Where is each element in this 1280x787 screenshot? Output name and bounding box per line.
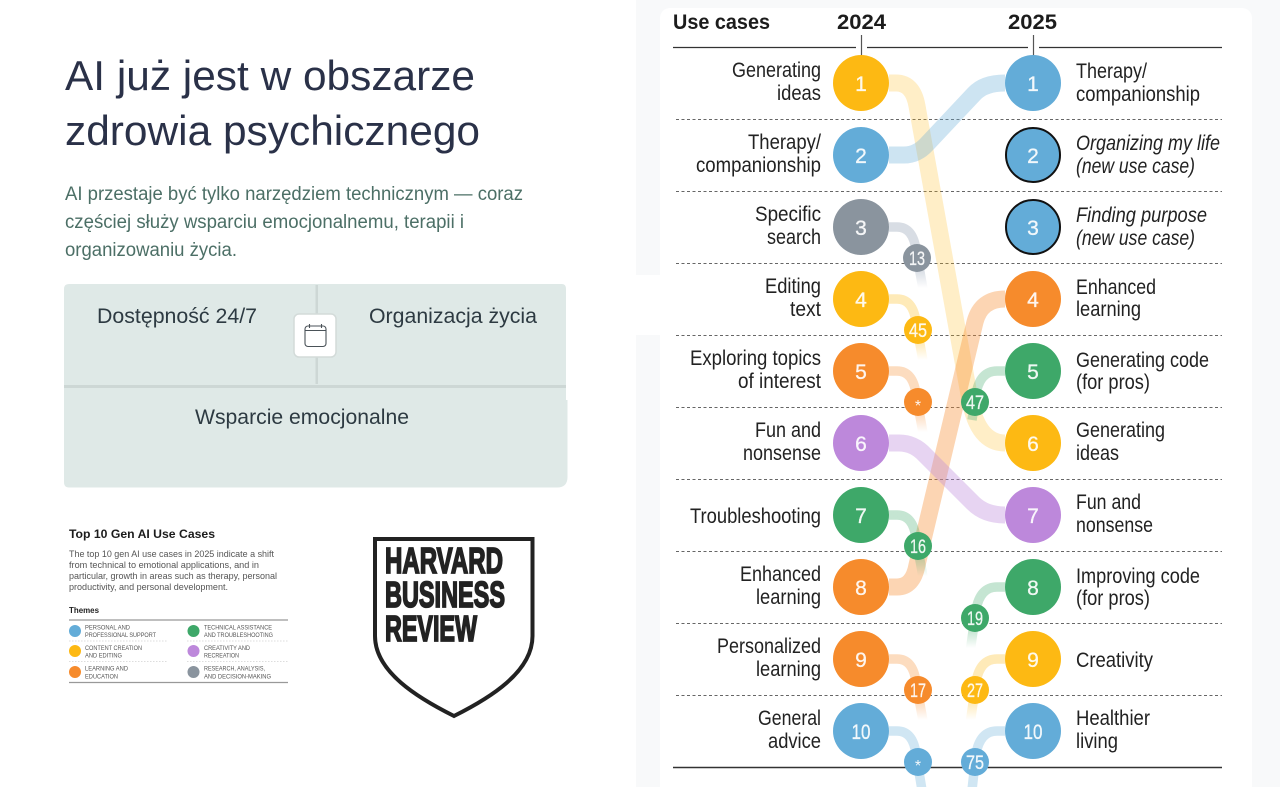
- table header: [673, 11, 1222, 56]
- 2025 rank circles: 3: [1027, 217, 1039, 240]
- 2024 rank circles: 2: [855, 145, 867, 168]
- table header: Use cases: [673, 11, 770, 34]
- previous and new rank badges: 17: [910, 681, 926, 702]
- previous and new rank badges: 19: [967, 609, 983, 630]
- inset description: [69, 549, 277, 592]
- legend: themes: EDUCATION: [85, 674, 118, 680]
- subtitle: [65, 184, 523, 261]
- legend: themes: PERSONAL AND: [85, 624, 130, 632]
- previous and new rank badges: *: [915, 398, 921, 415]
- logo: Harvard Business Review shield: [375, 539, 532, 716]
- 2024 use case labels: [690, 59, 821, 753]
- ribbon: improving code: [970, 587, 1005, 649]
- 2025 rank circles: 6: [1027, 433, 1039, 456]
- inset: Top 10 Gen AI Use Cases: [69, 527, 288, 682]
- 2024 use case labels: text: [790, 298, 821, 321]
- 2025 rank circles: 4: [1027, 289, 1039, 312]
- chart card: [660, 8, 1252, 787]
- 2024 rank circles: 5: [855, 361, 867, 384]
- 2025 use case labels: living: [1076, 730, 1118, 753]
- previous and new rank badges: [903, 244, 989, 776]
- 2025 use case labels: Improving code: [1076, 565, 1200, 588]
- 2025 rank circles: 7: [1027, 505, 1039, 528]
- 2024 use case labels: companionship: [696, 154, 821, 177]
- subtitle: organizowaniu życia.: [65, 240, 237, 261]
- ribbon: healthier living: [972, 731, 1005, 787]
- title: zdrowia psychicznego: [65, 107, 480, 154]
- 2024 use case labels: Editing: [765, 275, 821, 298]
- 2024 rank circles: 10: [852, 721, 870, 744]
- 2025 rank circles: 8: [1027, 577, 1039, 600]
- 2025 rank circles: 2: [1027, 145, 1039, 168]
- legend: themes: AND EDITING: [85, 652, 122, 660]
- 2024 rank circles: 9: [855, 649, 867, 672]
- 2024 use case labels: ideas: [777, 82, 821, 105]
- table row dividers: [676, 120, 1222, 696]
- legend: themes: LEARNING AND: [85, 666, 128, 672]
- 2025 rank circles: 10: [1024, 721, 1042, 744]
- previous and new rank badges: 45: [909, 321, 927, 342]
- 2024 use case labels: learning: [756, 658, 821, 681]
- 2025 use case labels: (new use case): [1076, 227, 1195, 250]
- previous and new rank badges: 13: [909, 249, 925, 270]
- 2025 use case labels: Creativity: [1076, 649, 1153, 672]
- 2025 use case labels: [1076, 60, 1220, 753]
- legend: themes: AND TROUBLESHOOTING: [204, 632, 273, 639]
- 2024 rank circles: [833, 55, 889, 759]
- logo: Harvard Business Review shield: BUSINESS: [385, 574, 505, 615]
- 2025 use case labels: Therapy/: [1076, 60, 1147, 83]
- legend: themes: [69, 605, 288, 682]
- 2025 use case labels: Finding purpose: [1076, 204, 1207, 227]
- inset description: productivity, and personal development.: [69, 582, 228, 592]
- inset heading: Top 10 Gen AI Use Cases: [69, 527, 215, 541]
- 2025 rank circles: 1: [1027, 73, 1039, 96]
- inset description: from technical to emotional applications, and in: [69, 560, 259, 570]
- 2024 use case labels: learning: [756, 586, 821, 609]
- ribbon: creativity: [970, 659, 1005, 721]
- 2024 rank circles: 7: [855, 505, 867, 528]
- 2024 rank circles: 8: [855, 577, 867, 600]
- ribbon: personalized learning: [889, 659, 923, 721]
- ribbon: troubleshooting: [889, 515, 923, 577]
- table header: 2024: [837, 11, 886, 34]
- logo: Harvard Business Review shield: HARVARD: [385, 540, 503, 581]
- 2025 use case labels: ideas: [1076, 442, 1119, 465]
- 2024 use case labels: search: [767, 226, 821, 249]
- 2024 use case labels: Exploring topics: [690, 347, 821, 370]
- benefit: life organization: Organizacja życia: [369, 305, 537, 328]
- 2025 use case labels: learning: [1076, 298, 1141, 321]
- legend: themes: PROFESSIONAL SUPPORT: [85, 632, 156, 639]
- 2025 use case labels: companionship: [1076, 83, 1200, 106]
- right background panel: [636, 0, 1280, 787]
- title: AI już jest w obszarze: [65, 52, 475, 99]
- 2025 use case labels: Fun and: [1076, 491, 1141, 514]
- previous and new rank badges: 47: [966, 393, 984, 414]
- ribbon: specific search: [889, 227, 923, 289]
- 2024 rank circles: 3: [855, 217, 867, 240]
- legend: themes: TECHNICAL ASSISTANCE: [204, 624, 272, 632]
- 2024 use case labels: General: [758, 707, 821, 730]
- subtitle: AI przestaje być tylko narzędziem technicznym — coraz: [65, 184, 523, 205]
- 2025 use case labels: Enhanced: [1076, 276, 1156, 299]
- legend: themes: RESEARCH, ANALYSIS,: [204, 666, 265, 672]
- 2025 rank circles: 9: [1027, 649, 1039, 672]
- 2024 rank circles: 1: [855, 73, 867, 96]
- 2024 use case labels: of interest: [738, 370, 821, 393]
- 2024 use case labels: Specific: [755, 203, 821, 226]
- 2025 rank circles: [1005, 55, 1061, 759]
- ribbon: therapy: [889, 83, 1005, 155]
- 2025 use case labels: Healthier: [1076, 707, 1150, 730]
- ribbon: general advice: [889, 731, 922, 787]
- 2024 rank circles: 6: [855, 433, 867, 456]
- ribbon: fun and nonsense: [889, 443, 1005, 515]
- subtitle: częściej służy wsparciu emocjonalnemu, terapii i: [65, 212, 464, 233]
- 2024 use case labels: Enhanced: [740, 563, 821, 586]
- ribbon: editing text: [889, 299, 923, 361]
- previous and new rank badges: 27: [967, 681, 983, 702]
- 2025 rank circles: 5: [1027, 361, 1039, 384]
- legend: themes: RECREATION: [204, 652, 239, 660]
- ribbon: generating code: [972, 371, 1005, 420]
- 2025 use case labels: (new use case): [1076, 155, 1195, 178]
- 2025 use case labels: (for pros): [1076, 587, 1150, 610]
- legend: themes: CREATIVITY AND: [204, 645, 250, 652]
- panel: key benefits: [64, 284, 568, 488]
- title: [65, 52, 480, 154]
- benefit: emotional support: Wsparcie emocjonalne: [195, 406, 409, 429]
- logo: Harvard Business Review shield: REVIEW: [385, 608, 477, 649]
- 2025 use case labels: Generating: [1076, 419, 1165, 442]
- 2024 use case labels: Generating: [732, 59, 821, 82]
- previous and new rank badges: *: [915, 758, 921, 775]
- inset description: The top 10 gen AI use cases in 2025 indicate a shift: [69, 549, 274, 559]
- 2024 rank circles: 4: [855, 289, 867, 312]
- 2025 use case labels: Generating code: [1076, 349, 1209, 372]
- 2025 use case labels: Organizing my life: [1076, 132, 1220, 155]
- 2024 use case labels: Troubleshooting: [690, 505, 821, 528]
- benefit: availability: Dostępność 24/7: [97, 305, 257, 328]
- icon: calendar: [294, 314, 336, 357]
- 2025 use case labels: (for pros): [1076, 371, 1150, 394]
- previous and new rank badges: 16: [910, 537, 926, 558]
- 2024 use case labels: advice: [768, 730, 821, 753]
- 2024 use case labels: Personalized: [717, 635, 821, 658]
- rank-change ribbons: [889, 83, 1005, 787]
- previous and new rank badges: 75: [966, 753, 984, 774]
- ribbon: generating ideas: [889, 83, 1005, 443]
- 2024 use case labels: Therapy/: [748, 131, 821, 154]
- inset description: particular, growth in areas such as therapy, personal: [69, 571, 277, 581]
- table header: 2025: [1008, 11, 1057, 34]
- 2024 use case labels: Fun and: [755, 419, 821, 442]
- legend: themes: AND DECISION-MAKING: [204, 674, 271, 680]
- ribbon: exploring topics: [889, 371, 923, 433]
- legend: themes: Themes: [69, 605, 99, 615]
- legend: themes: CONTENT CREATION: [85, 645, 142, 652]
- 2025 use case labels: nonsense: [1076, 514, 1153, 537]
- ribbon: enhanced learning: [889, 299, 1005, 587]
- 2024 use case labels: nonsense: [743, 442, 821, 465]
